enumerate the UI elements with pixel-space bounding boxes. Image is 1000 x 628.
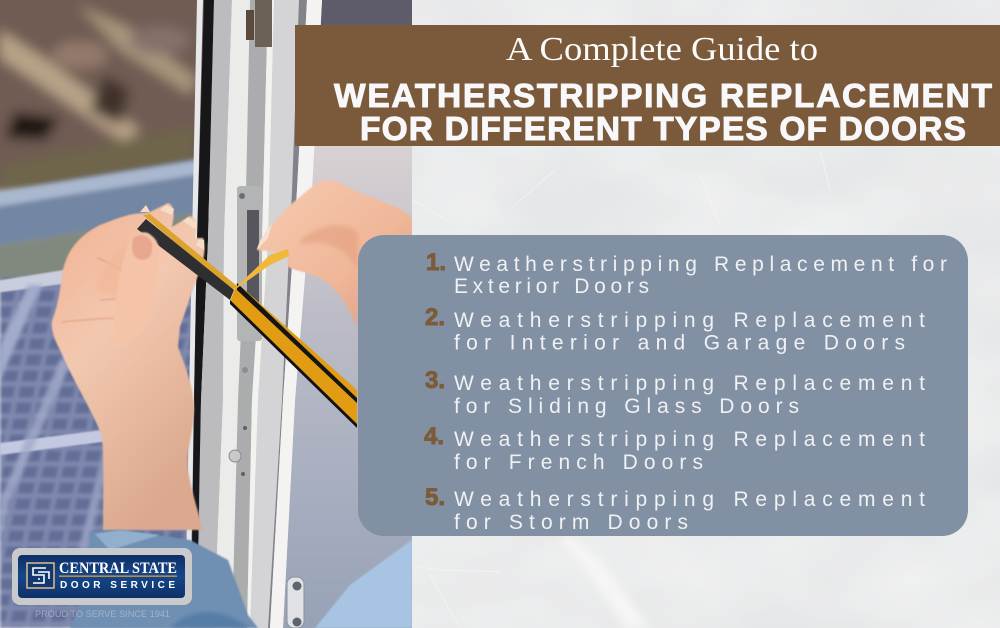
list item 1: Exterior Doors bbox=[454, 275, 649, 298]
left hand: palm and fingers bbox=[52, 203, 205, 530]
thumbnail bbox=[132, 235, 152, 260]
title banner bbox=[295, 25, 1000, 148]
right hand bbox=[257, 180, 412, 328]
marble background bbox=[412, 0, 1000, 628]
heading line 1: WEATHERSTRIPPING REPLACEMENT bbox=[334, 78, 993, 115]
logo subline: DOOR SERVICE bbox=[60, 580, 175, 591]
list item 3: Weatherstripping Replacement bbox=[454, 372, 925, 395]
weatherstripping tape bbox=[137, 214, 357, 428]
logo name: CENTRAL STATE bbox=[59, 560, 177, 577]
icon: logo mark bbox=[27, 563, 54, 588]
title line: a complete guide to: A Complete Guide to bbox=[506, 31, 818, 68]
photo background: blurred foliage bbox=[0, 0, 220, 195]
list item 4 bbox=[424, 423, 925, 474]
list item 5 bbox=[425, 484, 925, 534]
list item 2 bbox=[425, 304, 925, 354]
list item 3: for Sliding Glass Doors bbox=[454, 395, 799, 418]
left hand: thumb bbox=[114, 231, 160, 319]
list item 3 bbox=[425, 367, 925, 418]
list item 4: for French Doors bbox=[454, 451, 703, 474]
fleece sleeves bbox=[70, 530, 412, 628]
list item 2: Weatherstripping Replacement bbox=[454, 309, 925, 332]
list item 1: Weatherstripping Replacement for bbox=[454, 253, 947, 276]
list item 1: 1. bbox=[426, 249, 446, 276]
panel: list of door types bbox=[358, 235, 968, 536]
logo: Central State Door Service bbox=[12, 548, 192, 620]
list item 3: 3. bbox=[425, 367, 445, 394]
list item 5: for Storm Doors bbox=[454, 511, 688, 534]
door frame bbox=[185, 0, 412, 628]
heading line 2: FOR DIFFERENT TYPES OF DOORS bbox=[360, 111, 966, 148]
photo background: blue wall ledge bbox=[0, 158, 200, 290]
list item 1 bbox=[426, 249, 947, 298]
list item 5: Weatherstripping Replacement bbox=[454, 488, 925, 511]
list item 2: for Interior and Garage Doors bbox=[454, 332, 905, 354]
tagline: PROUD TO SERVE SINCE 1941 bbox=[35, 609, 170, 620]
list item 5: 5. bbox=[425, 484, 445, 511]
photo: hands installing weatherstripping on a door frame bbox=[0, 0, 412, 628]
list item 4: Weatherstripping Replacement bbox=[454, 428, 925, 451]
list item 2: 2. bbox=[425, 304, 445, 331]
photo background: solar panel bbox=[0, 269, 200, 628]
list item 4: 4. bbox=[424, 423, 444, 450]
